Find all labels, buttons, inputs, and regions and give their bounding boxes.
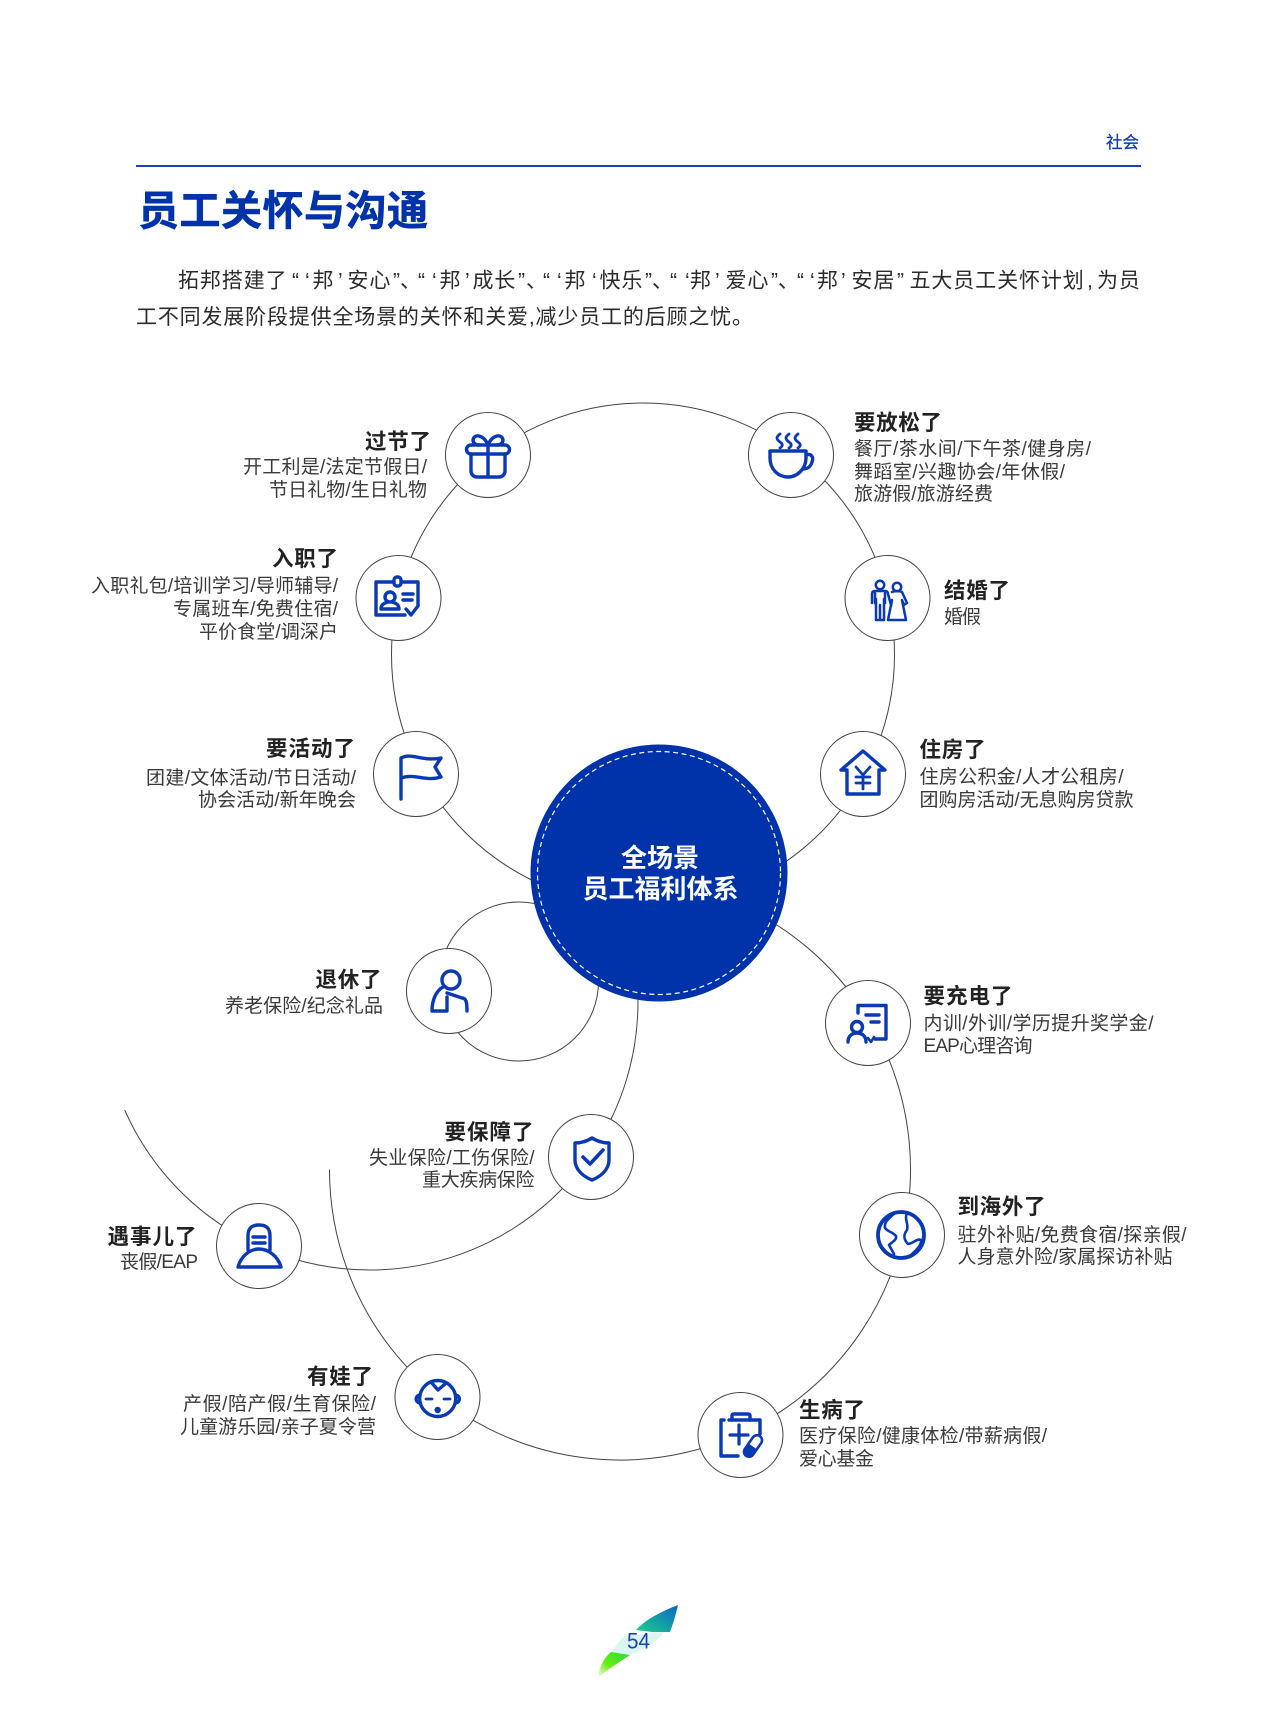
- label: housing: 住房了: [920, 738, 986, 762]
- node: parenthood: [180, 1354, 480, 1440]
- intro paragraph: 工不同发展阶段提供全场景的关怀和关爱,减少员工的后顾之忧。: [136, 306, 753, 329]
- central hub: 全场景: [621, 843, 699, 873]
- label: housing: [920, 738, 1134, 811]
- node: marriage: [845, 556, 1010, 640]
- intro paragraph: ’: [465, 270, 471, 292]
- intro paragraph: ‘: [810, 270, 816, 292]
- node: activities: [146, 732, 458, 816]
- label: recharge: EAP心理咨询: [924, 1035, 1032, 1057]
- icon: tombstone: [238, 1225, 281, 1267]
- label: parenthood: 产假/陪产假/生育保险/: [183, 1393, 377, 1415]
- intro paragraph: ’: [841, 270, 847, 292]
- label: relaxation: 要放松了: [854, 411, 942, 435]
- label: recharge: 要充电了: [924, 984, 1012, 1008]
- label: overseas: 到海外了: [958, 1195, 1046, 1219]
- intro paragraph: ‘: [557, 270, 563, 292]
- label: activities: [146, 737, 357, 811]
- icon: coffee cup: [770, 434, 813, 477]
- label: parenthood: 儿童游乐园/亲子夏令营: [180, 1416, 376, 1438]
- label: festivals: 节日礼物/生日礼物: [269, 479, 427, 501]
- label: bereavement: 丧假/EAP: [120, 1251, 198, 1273]
- label: illness: [799, 1398, 1048, 1470]
- intro paragraph: 、: [526, 270, 548, 292]
- intro paragraph: 邦: [690, 270, 712, 292]
- label: retirement: [225, 968, 383, 1017]
- intro paragraph: 邦: [564, 270, 586, 292]
- icon: elder with cane: [432, 971, 467, 1011]
- page number with feather: 54: [627, 1628, 650, 1654]
- icon: flag: [401, 756, 441, 799]
- label: marriage: 婚假: [944, 606, 981, 628]
- node: security: [369, 1114, 634, 1200]
- central hub: 员工福利体系: [582, 874, 738, 904]
- intro paragraph: 安居: [852, 270, 895, 292]
- label: retirement: 退休了: [316, 968, 382, 992]
- intro paragraph: [136, 270, 1141, 329]
- label: relaxation: 餐厅/茶水间/下午茶/健身房/: [854, 438, 1092, 460]
- label: security: 失业保险/工伤保险/: [369, 1147, 535, 1169]
- intro paragraph: “: [543, 270, 551, 292]
- intro paragraph: ”: [518, 270, 526, 292]
- label: relaxation: 舞蹈室/兴趣协会/年休假/: [854, 461, 1066, 483]
- label: relaxation: [854, 411, 1092, 505]
- node: overseas: [860, 1192, 1187, 1278]
- intro paragraph: 、: [400, 270, 422, 292]
- label: festivals: 开工利是/法定节假日/: [243, 456, 428, 478]
- icon: staff badge: [376, 577, 418, 615]
- intro paragraph: “: [418, 270, 426, 292]
- node: illness: [698, 1392, 1048, 1478]
- label: overseas: 驻外补贴/免费食宿/探亲假/: [958, 1224, 1187, 1246]
- node: bereavement: [108, 1204, 302, 1288]
- intro paragraph: 邦: [440, 270, 461, 292]
- label: onboarding: 入职礼包/培训学习/导师辅导/: [91, 575, 339, 597]
- intro paragraph: “: [292, 270, 300, 292]
- label: security: [369, 1120, 535, 1191]
- label: housing: 住房公积金/人才公租房/: [920, 766, 1124, 788]
- intro paragraph: 邦: [817, 270, 839, 292]
- label: onboarding: [91, 547, 339, 643]
- intro paragraph: ’: [338, 270, 344, 292]
- intro paragraph: ,: [1087, 270, 1094, 292]
- label: festivals: 过节了: [365, 430, 431, 454]
- central hub: [530, 744, 788, 1002]
- node: recharge: [826, 980, 1154, 1066]
- label: activities: 要活动了: [266, 737, 355, 761]
- intro paragraph: 爱心: [726, 270, 769, 292]
- intro paragraph: 邦: [312, 270, 334, 292]
- label: illness: 爱心基金: [799, 1448, 874, 1470]
- intro paragraph: ”: [645, 270, 653, 292]
- section tag: 社会: [1106, 133, 1139, 152]
- label: recharge: [924, 984, 1154, 1057]
- label: recharge: 内训/外训/学历提升奖学金/: [924, 1012, 1154, 1034]
- intro paragraph: ”: [897, 270, 905, 292]
- intro paragraph: ’: [715, 270, 721, 292]
- title: 员工关怀与沟通: [138, 188, 428, 234]
- intro paragraph: 、: [778, 270, 800, 292]
- label: activities: 协会活动/新年晚会: [198, 789, 356, 811]
- label: onboarding: 入职了: [272, 547, 338, 571]
- icon: couple: [872, 581, 907, 620]
- icon: shield: [575, 1138, 609, 1180]
- node: onboarding: [91, 547, 441, 643]
- label: overseas: 人身意外险/家属探访补贴: [958, 1246, 1172, 1268]
- connector ring: upper circle: [392, 403, 894, 906]
- intro paragraph: ‘: [305, 270, 311, 292]
- label: onboarding: 平价食堂/调深户: [199, 621, 338, 643]
- node: festivals: [243, 412, 530, 501]
- label: bereavement: [108, 1225, 198, 1273]
- intro paragraph: 安心: [348, 270, 391, 292]
- intro paragraph: ”: [393, 270, 401, 292]
- label: activities: 团建/文体活动/节日活动/: [146, 767, 357, 789]
- intro paragraph: 拓邦搭建了: [178, 270, 288, 292]
- label: security: 重大疾病保险: [422, 1169, 534, 1191]
- icon: training document: [848, 1006, 886, 1042]
- label: marriage: 结婚了: [944, 579, 1010, 603]
- intro paragraph: ‘: [685, 270, 691, 292]
- label: onboarding: 专属班车/免费住宿/: [173, 598, 339, 620]
- connector arc: lower right sweep: [330, 897, 910, 1460]
- label: illness: 医疗保险/健康体检/带薪病假/: [799, 1425, 1048, 1447]
- intro paragraph: ”: [771, 270, 779, 292]
- label: bereavement: 遇事儿了: [108, 1225, 196, 1249]
- intro paragraph: 快乐: [600, 270, 643, 292]
- icon: baby face: [416, 1380, 459, 1416]
- intro paragraph: 、: [652, 270, 674, 292]
- label: festivals: [243, 430, 431, 501]
- label: retirement: 养老保险/纪念礼品: [225, 994, 383, 1017]
- label: overseas: [958, 1195, 1187, 1268]
- connector arc: lower left sweep: [125, 990, 638, 1270]
- icon: house with yen: [841, 751, 885, 794]
- connector ring: retirement loop: [440, 902, 598, 1061]
- icon: gift: [466, 436, 510, 477]
- intro paragraph: 五大员工关怀计划: [910, 270, 1085, 292]
- node: relaxation: [748, 411, 1092, 505]
- label: parenthood: 有娃了: [307, 1365, 373, 1389]
- label: housing: 团购房活动/无息购房贷款: [920, 789, 1134, 811]
- intro paragraph: “: [797, 270, 805, 292]
- page number with feather: [598, 1605, 678, 1678]
- label: marriage: [944, 579, 1010, 628]
- header rule: [136, 165, 1141, 167]
- intro paragraph: 成长: [472, 270, 516, 292]
- node: housing: [820, 732, 1134, 816]
- icon: medical kit: [721, 1414, 764, 1459]
- label: parenthood: [180, 1365, 377, 1438]
- label: relaxation: 旅游假/旅游经费: [854, 483, 993, 505]
- intro paragraph: “: [670, 270, 678, 292]
- node: retirement: [225, 948, 492, 1034]
- intro paragraph: 为员: [1097, 270, 1141, 292]
- intro paragraph: ‘: [432, 270, 438, 292]
- label: illness: 生病了: [799, 1398, 865, 1422]
- label: security: 要保障了: [444, 1120, 534, 1144]
- intro paragraph: ‘: [592, 270, 598, 292]
- icon: globe: [878, 1212, 924, 1258]
